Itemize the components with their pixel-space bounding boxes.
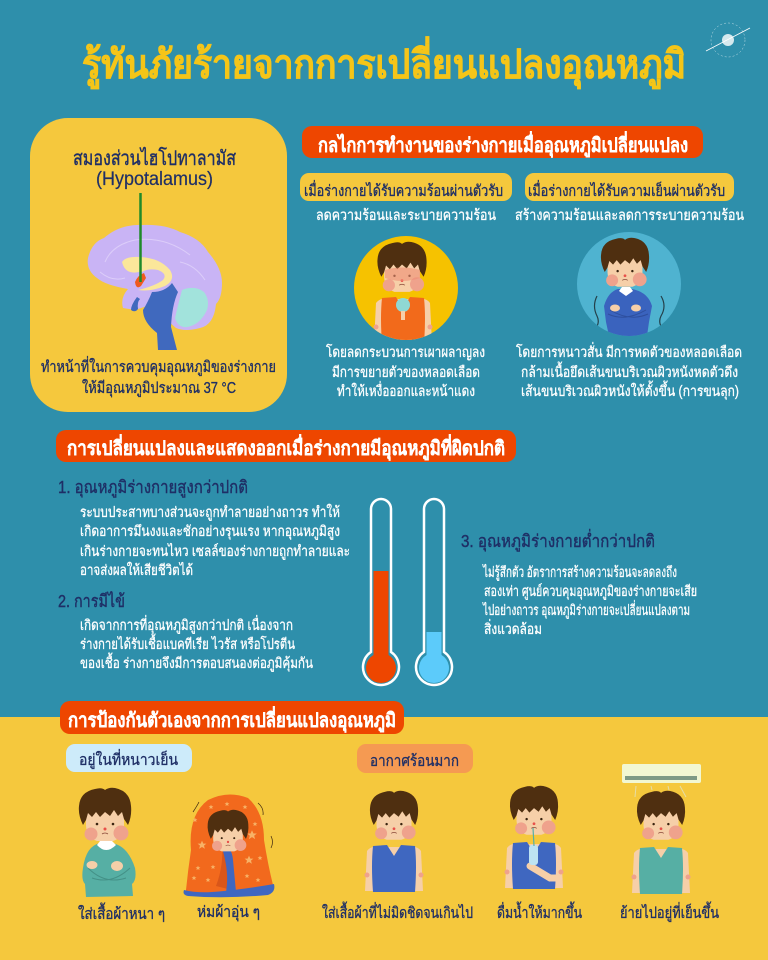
label: hot weather: อากาศร้อนมาก — [370, 753, 459, 770]
item: move somewhere cool — [620, 764, 719, 923]
label: cold weather — [66, 744, 192, 772]
caption: ย้ายไปอยู่ที่เย็นขึ้น — [620, 901, 719, 923]
description: heat — [326, 343, 485, 400]
text block: below normal: สองเท่า ศูนย์ควบคุมอุณหภูมิของร่างกายจะเสีย — [484, 583, 697, 600]
label: cold weather: อยู่ในที่หนาวเย็น — [79, 749, 178, 770]
subheading: heat: ลดความร้อนและระบายความร้อน — [316, 207, 496, 224]
text block: below normal: 3. อุณหภูมิร่างกายต่ำกว่าปกติ — [461, 529, 655, 552]
label: heat: เมื่อร่างกายได้รับความร้อนผ่านตัวรับ — [304, 180, 503, 200]
illustration: boy in green vest — [632, 791, 690, 894]
description: ทำหน้าที่ในการควบคุมอุณหภูมิของร่างกาย — [41, 356, 276, 377]
item: light clothes — [322, 791, 473, 922]
heading: protection: การป้องกันตัวเองจากการเปลี่ยนแปลงอุณหภูมิ — [68, 705, 396, 734]
item: drink water — [497, 786, 582, 922]
pointer line — [139, 193, 142, 282]
text block: above normal: เกิดอาการมึนงงและชักอย่างรุนแรง หากอุณหภูมิสูง — [80, 524, 340, 540]
icon: institute logo — [706, 23, 750, 57]
heading: abnormal temperature: การเปลี่ยนแปลงและแสดงออกเมื่อร่างกายมีอุณหภูมิที่ผิดปกติ — [67, 433, 505, 462]
illustration: hot boy — [354, 236, 458, 344]
heading: hypothalamus: สมองส่วนไฮโปทาลามัส — [73, 147, 236, 170]
text block: above normal: ระบบประสาทบางส่วนจะถูกทำลายอย่างถาวร ทำให้ — [80, 503, 340, 521]
illustration: boy in blanket — [184, 794, 274, 897]
label: cold: เมื่อร่างกายได้รับความเย็นผ่านตัวรับ — [528, 180, 725, 200]
text block: below normal — [461, 529, 697, 638]
heading: abnormal temperature — [56, 430, 516, 462]
text block: above normal: 1. อุณหภูมิร่างกายสูงกว่าปกติ — [58, 477, 248, 498]
panel: heat response — [300, 173, 512, 400]
illustration: boy in blue vest — [364, 791, 424, 892]
description: cold — [516, 342, 742, 400]
description: heat: ทำให้เหงื่อออกและหน้าแดง — [337, 381, 475, 400]
caption: ดื่มน้ำให้มากขึ้น — [497, 901, 582, 922]
description: heat: มีการขยายตัวของหลอดเลือด — [332, 364, 480, 381]
item: warm blanket — [184, 794, 274, 922]
chart: cold thermometer — [416, 499, 452, 685]
panel: hypothalamus — [30, 118, 287, 412]
chart: hot thermometer — [363, 499, 399, 685]
text block: above normal — [58, 477, 350, 579]
text block: fever — [58, 591, 313, 672]
label: cold — [525, 173, 734, 201]
text block: fever: เกิดจากการที่อุณหภูมิสูงกว่าปกติ เนื่องจาก — [80, 615, 293, 634]
caption: ห่มผ้าอุ่น ๆ — [197, 904, 260, 922]
text block: below normal: สิ่งแวดล้อม — [484, 619, 542, 638]
illustration: boy in sweater — [79, 788, 136, 897]
title: รู้ทันภัยร้ายจากการเปลี่ยนแปลงอุณหภูมิ — [82, 36, 686, 90]
text block: fever: ร่างกายได้รับเชื้อแบคทีเรีย ไวรัส หรือโปรตีน — [80, 633, 295, 653]
text block: fever: 2. การมีไข้ — [58, 591, 125, 611]
caption: ใส่เสื้อผ้าที่ไม่มิดชิดจนเกินไป — [322, 901, 473, 922]
label: hot weather — [357, 744, 473, 773]
illustration: air conditioner — [622, 764, 701, 797]
text block: fever: ของเชื้อ ร่างกายจึงมีการตอบสนองต่อภูมิคุ้มกัน — [80, 652, 313, 672]
caption: ใส่เสื้อผ้าหนา ๆ — [78, 902, 165, 923]
text block: above normal: อาจส่งผลให้เสียชีวิตได้ — [80, 561, 193, 579]
illustration: boy drinking — [504, 786, 564, 889]
heading: body mechanism: กลไกการทำงานของร่างกายเมื่ออุณหภูมิเปลี่ยนแปลง — [318, 130, 688, 159]
label: heat — [300, 173, 512, 201]
temperature note: ให้มีอุณหภูมิประมาณ 37 °C — [82, 379, 236, 398]
illustration: cold boy — [577, 232, 681, 336]
heading: protection — [60, 701, 404, 734]
text block: below normal: ไม่รู้สึกตัว อัตราการสร้างความร้อนจะลดลงถึง — [482, 563, 677, 581]
description: heat: โดยลดกระบวนการเผาผลาญลง — [326, 343, 485, 361]
item: thick clothes — [78, 788, 165, 923]
yellow lower band — [0, 717, 768, 960]
panel: cold response — [515, 173, 744, 400]
heading: body mechanism — [302, 126, 703, 159]
heading: latin name: (Hypotalamus) — [96, 169, 213, 190]
text block: above normal: เกินร่างกายจะทนไหว เซลล์ของร่างกายถูกทำลายและ — [80, 542, 350, 560]
illustration: brain — [88, 225, 222, 350]
